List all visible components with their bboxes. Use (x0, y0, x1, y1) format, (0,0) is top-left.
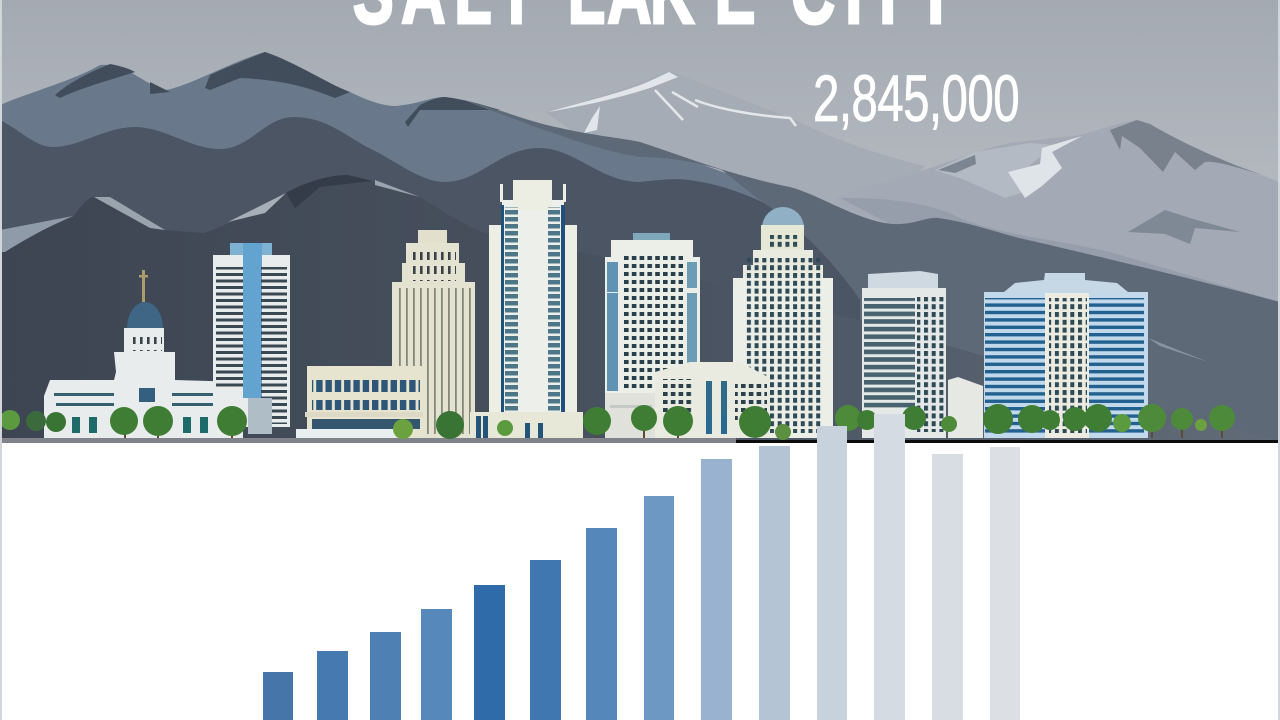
tallest tower (470, 180, 583, 439)
left edge border (0, 0, 2, 720)
tower: blue central column (213, 243, 290, 434)
grid-window tower (605, 233, 700, 395)
wide blue glass building (984, 273, 1148, 438)
right edge border (1278, 0, 1280, 720)
ground line black (736, 440, 1280, 443)
striped tower left (862, 271, 946, 438)
row of trees (0, 404, 1235, 440)
white lower panel (0, 443, 1280, 720)
ground line grey (0, 438, 736, 443)
capitol building (44, 270, 243, 438)
arched low building (655, 362, 770, 438)
art deco tower (392, 230, 475, 438)
dark band and lower right slope (463, 100, 1280, 442)
podium block (605, 393, 657, 438)
bar chart (263, 414, 1020, 720)
right mountain range (835, 120, 1280, 310)
slate mountain layer (0, 52, 800, 442)
domed tower (733, 207, 833, 438)
small white building (948, 377, 983, 438)
low office building (296, 366, 423, 439)
front dark mountain layer (0, 175, 1280, 442)
sky background (0, 0, 1280, 442)
population figure: 2,845,000 (813, 62, 1020, 136)
mid dark mountain layer (0, 117, 860, 442)
dark ridge caps (55, 52, 500, 127)
distant snowy peak centre (545, 71, 925, 220)
